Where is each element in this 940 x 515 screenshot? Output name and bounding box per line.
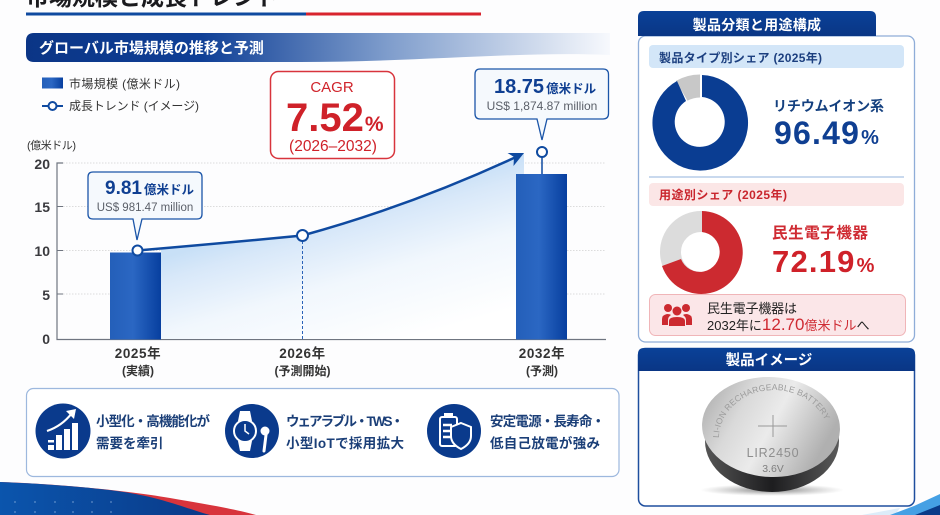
forecast start marker: [302, 241, 304, 339]
text: driver 3: 安定電源・長寿命・: [490, 413, 605, 429]
panel: product classification: [638, 11, 914, 342]
panel heading: [638, 348, 915, 371]
icon: watch and earbud: [225, 404, 279, 458]
y axis: 20: [34, 156, 50, 172]
x axis labels: 2032年: [519, 345, 565, 361]
callout 2032: US$ 1,874.87 million: [487, 99, 597, 113]
donut: application: [662, 211, 743, 294]
x axis labels: 2025年: [115, 345, 161, 361]
data points: [132, 147, 547, 256]
callout 2032: [475, 69, 608, 140]
chart legend: [42, 76, 199, 113]
text: driver 3: 低自己放電が強み: [490, 435, 600, 451]
y axis: 15: [34, 199, 50, 215]
x axis labels: (予測): [526, 363, 558, 378]
stat: lithium ion: リチウムイオン系: [773, 98, 884, 114]
y axis unit: (億米ドル): [27, 139, 76, 152]
y axis: [34, 156, 606, 347]
text: driver 2: ウェアラブル・TWS・: [286, 413, 404, 429]
CAGR callout: 7.52%: [286, 96, 384, 140]
y axis: 0: [42, 331, 50, 347]
chart legend: 成長トレンド (イメージ): [69, 99, 199, 113]
CAGR callout: (2026–2032): [289, 138, 377, 155]
icon: growth bars: [36, 404, 90, 458]
y axis: 5: [42, 287, 50, 303]
gridlines: [63, 163, 606, 294]
panel heading: 製品イメージ: [726, 352, 812, 369]
product photo: coin battery: LIR2450: [747, 446, 799, 460]
stat: lithium ion: 96.49%: [774, 115, 880, 151]
panel heading: 製品分類と用途構成: [693, 17, 821, 33]
CAGR callout: [270, 72, 394, 158]
text: driver 2: [286, 413, 404, 451]
stat: consumer electronics: 72.19%: [772, 244, 876, 279]
section heading: market size: [26, 33, 610, 62]
subheading: product type: 製品タイプ別シェア (2025年): [659, 50, 822, 65]
text: driver 1: 小型化・高機能化が: [96, 413, 210, 429]
stat: lithium ion: [773, 98, 884, 151]
product photo: coin battery: 3.6V: [762, 463, 784, 475]
x axis labels: (実績): [122, 363, 154, 378]
callout: consumer electronics 2032: [650, 294, 906, 336]
callout text: [707, 301, 870, 334]
text: driver 1: [96, 413, 210, 451]
callout text: 2032年に12.70億米ドルへ: [707, 315, 870, 334]
product photo: coin battery: LI-ION RECHARGEABLE BATTERY: [713, 384, 830, 438]
stat: consumer electronics: 民生電子機器: [772, 223, 868, 242]
bar 2032: [516, 174, 567, 340]
panel: product image: [638, 348, 916, 507]
callout 2025: [88, 172, 202, 240]
chart legend: 市場規模 (億米ドル): [69, 76, 180, 91]
callout 2032: 18.75億米ドル: [494, 76, 597, 98]
subheading: product type: [649, 45, 904, 68]
text: driver 1: 需要を牽引: [96, 435, 164, 451]
trend area: [161, 153, 524, 339]
x axis labels: [115, 345, 565, 378]
product photo: coin battery: [702, 377, 840, 496]
text: driver 2: 小型IoTで採用拡大: [286, 435, 404, 451]
icon: people: [662, 304, 692, 326]
x axis labels: (予測開始): [274, 363, 330, 378]
subheading: application: 用途別シェア (2025年): [659, 187, 787, 202]
callout 2025: 9.81億米ドル: [105, 178, 194, 199]
title underline: [26, 12, 481, 16]
section heading: market size: グローバル市場規模の推移と予測: [39, 39, 264, 57]
subheading: application: [649, 183, 904, 206]
callout 2025: US$ 981.47 million: [97, 202, 193, 214]
donut: product type: [652, 74, 748, 171]
panel: growth drivers: [26, 388, 619, 476]
x axis labels: 2026年: [279, 345, 326, 361]
CAGR callout: CAGR: [310, 79, 354, 96]
bar and trend chart: [27, 69, 608, 378]
stat: consumer electronics: [772, 223, 876, 279]
callout text: 民生電子機器は: [707, 301, 797, 316]
panel heading: [638, 11, 876, 36]
text: driver 3: [490, 413, 605, 451]
decorative bottom left swoosh: [0, 482, 256, 515]
bar 2025: [110, 252, 161, 340]
trend arrow: [138, 153, 524, 250]
divider: [649, 176, 904, 178]
icon: battery and shield: [427, 404, 481, 458]
y axis: 10: [34, 243, 50, 259]
decorative bottom right swoosh: [862, 494, 940, 515]
